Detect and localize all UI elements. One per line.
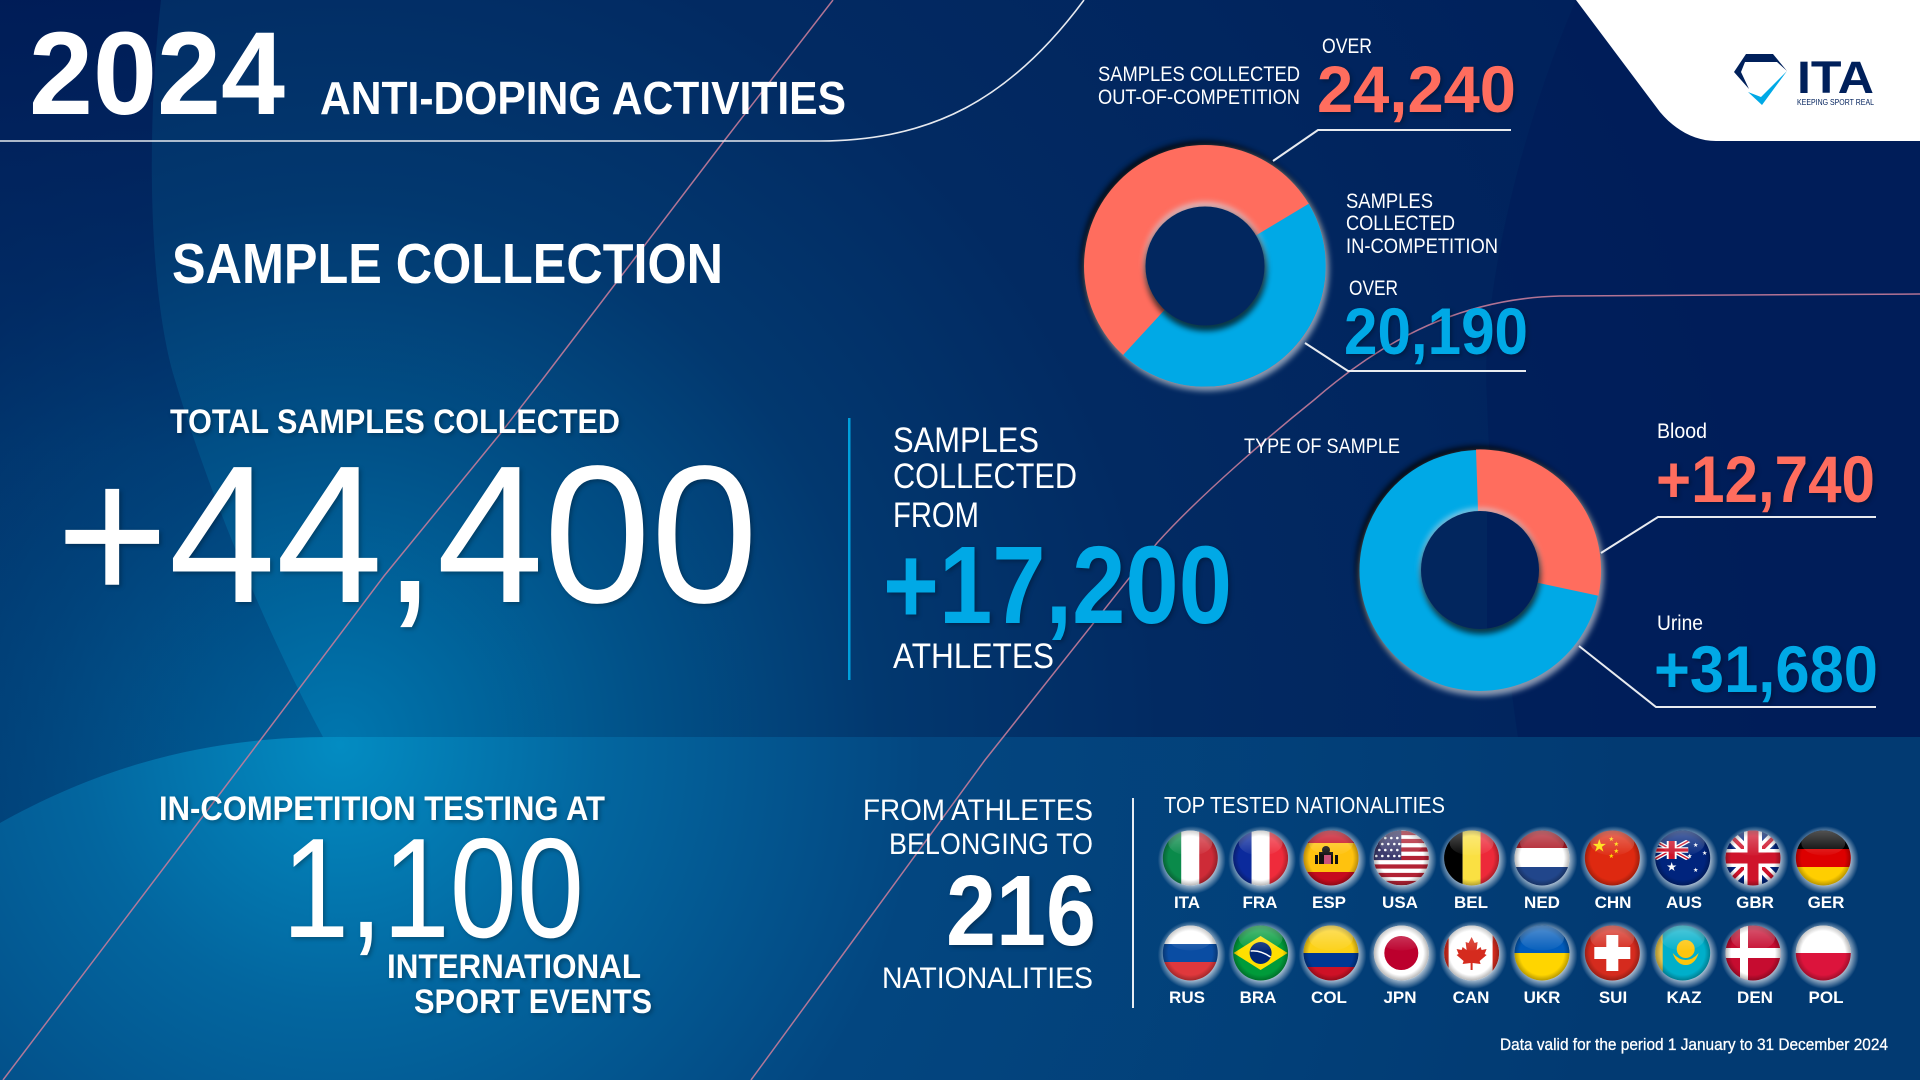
title text: ANTI-DOPING ACTIVITIES [320,72,846,124]
donut chart: in/out of competition [1081,141,1329,391]
in-competition over: OVER [1349,277,1398,300]
flag labels row 2 [1169,988,1843,1007]
flag labels row 2: SUI [1599,988,1627,1007]
flag labels row 1: NED [1524,893,1560,912]
in-competition label: COLLECTED [1346,212,1455,235]
nationalities label: FROM ATHLETES [863,794,1093,827]
flag labels row 1: ESP [1312,893,1346,912]
out-of-competition label: SAMPLES COLLECTED [1098,63,1300,86]
logo tagline: KEEPING SPORT REAL [1797,97,1874,107]
callout line: out-of-competition [1273,130,1511,161]
in-competition label: IN-COMPETITION [1346,235,1498,258]
flag labels row 2: COL [1311,988,1347,1007]
section heading: SAMPLE COLLECTION [172,232,723,296]
flag: CHN [1580,826,1648,894]
flag: FRA [1228,826,1296,894]
flag: POL [1791,921,1859,989]
total samples heading: TOTAL SAMPLES COLLECTED [170,403,620,441]
title year: 2024 [29,8,285,140]
flag labels row 1 [1174,893,1844,912]
athletes label: SAMPLES [893,421,1039,460]
flag labels row 2: POL [1809,988,1843,1007]
events number: 1,100 [282,809,584,968]
flag labels row 1: AUS [1666,893,1702,912]
segment: blood [1476,449,1601,596]
nationalities caption: NATIONALITIES [882,962,1093,995]
out-of-competition number: 24,240 [1317,52,1516,126]
flag labels row 2: BRA [1240,988,1276,1007]
flag: DEN [1720,921,1788,989]
flag: GER [1791,826,1859,894]
flag labels row 1: CHN [1595,893,1631,912]
data note: Data valid for the period 1 January to 31 December 2024 [1500,1035,1888,1054]
decorative curve: pink right [751,294,1920,1080]
flag: ESP [1298,826,1366,894]
flag labels row 2: DEN [1737,988,1773,1007]
flag: JPN [1369,921,1437,989]
athletes label: FROM [893,496,979,535]
flag: SUI [1580,921,1648,989]
in-competition label [1346,190,1498,258]
flag: AUS [1650,826,1718,894]
flag labels row 1: BEL [1454,893,1488,912]
segment: urine [1360,450,1600,691]
blood number: +12,740 [1656,442,1875,516]
logo wordmark: ITA [1797,52,1874,103]
athletes number: +17,200 [883,524,1232,647]
top tested heading: TOP TESTED NATIONALITIES [1164,792,1445,818]
flag: COL [1298,921,1366,989]
events caption: INTERNATIONAL [387,948,641,986]
in-competition label: SAMPLES [1346,190,1433,213]
callout line: in-competition [1305,343,1526,371]
flag labels row 2: KAZ [1667,988,1701,1007]
in-competition number: 20,190 [1344,294,1528,368]
flag labels row 1: GBR [1736,893,1774,912]
header rule curve [0,0,1084,141]
logo diamond icon [1734,54,1787,105]
flag: UKR [1510,921,1578,989]
flag labels row 2: JPN [1383,988,1417,1007]
flag labels row 1: USA [1382,893,1418,912]
nationalities number: 216 [946,855,1096,967]
callout line: urine [1579,646,1876,707]
logo corner panel [1576,0,1920,141]
donut chart: type of sample [1356,446,1604,696]
flag: BEL [1439,826,1507,894]
segment: in-competition [1123,204,1326,387]
flag: USA [1369,826,1437,894]
out-of-competition label: OUT-OF-COMPETITION [1098,86,1300,109]
flag: RUS [1158,921,1226,989]
events caption [387,948,652,1021]
callout line: blood [1601,517,1876,553]
nationalities label: BELONGING TO [889,828,1093,861]
type of sample label: TYPE OF SAMPLE [1244,435,1400,458]
urine number: +31,680 [1654,632,1878,706]
divider [1132,798,1134,1008]
athletes label: COLLECTED [893,457,1077,496]
in-competition testing heading: IN-COMPETITION TESTING AT [159,790,605,828]
flag labels row 2: RUS [1169,988,1205,1007]
out-of-competition label [1098,63,1300,109]
divider [848,418,850,680]
flag labels row 2: UKR [1524,988,1560,1007]
nationalities block [863,794,1096,995]
urine label: Urine [1657,612,1703,635]
nationalities label [863,794,1093,861]
flag labels row 1: ITA [1174,893,1200,912]
decorative curve: pink left [3,0,833,1080]
athletes label [893,421,1077,535]
events caption: SPORT EVENTS [414,983,652,1021]
flag: GBR [1720,826,1788,894]
segment: out-of-competition [1084,145,1326,387]
flag: CAN [1439,921,1507,989]
out-of-competition over: OVER [1322,35,1372,58]
flag: BRA [1228,921,1296,989]
athletes block [883,421,1232,676]
flag labels row 1: GER [1808,893,1844,912]
athletes caption: ATHLETES [893,637,1054,676]
flag: ITA [1158,826,1226,894]
flag labels row 1: FRA [1243,893,1277,912]
total samples number: +44,400 [56,425,758,644]
flag labels row 2: CAN [1453,988,1489,1007]
blood label: Blood [1657,420,1707,443]
flag: NED [1510,826,1578,894]
flag: KAZ [1650,921,1718,989]
